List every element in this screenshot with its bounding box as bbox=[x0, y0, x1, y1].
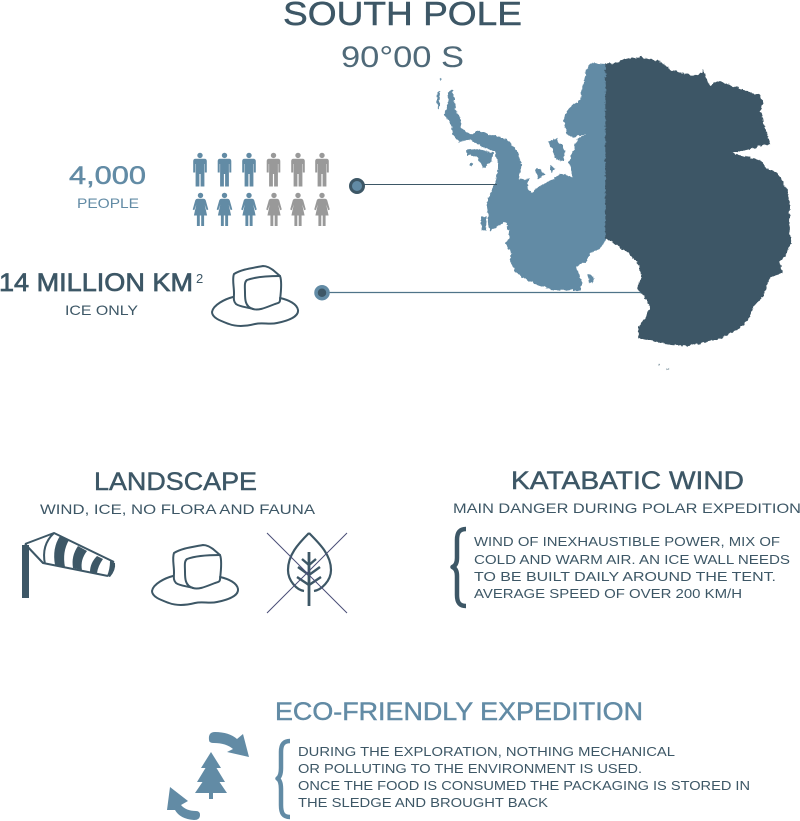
icon: ice cube bbox=[212, 266, 298, 326]
subheading: landscape: WIND, ICE, NO FLORA AND FAUNA bbox=[40, 501, 316, 517]
icon: windsock bbox=[22, 533, 115, 598]
connector: ice to map bbox=[316, 287, 641, 299]
heading: landscape: LANDSCAPE bbox=[94, 468, 257, 496]
ice area: 2 bbox=[196, 271, 203, 286]
people count: PEOPLE bbox=[77, 195, 139, 211]
heading: katabatic wind: KATABATIC WIND bbox=[511, 467, 744, 495]
icon: crossed-out leaf bbox=[267, 533, 347, 613]
west Antarctica bbox=[437, 63, 606, 291]
text: katabatic description: WIND OF INEXHAUSTIBLE POWER, MIX OF bbox=[474, 534, 780, 549]
text: katabatic description: AVERAGE SPEED OF OVER 200 KM/H bbox=[474, 586, 742, 601]
ice area bbox=[0, 269, 203, 318]
icon: ice cube bbox=[152, 545, 238, 605]
east Antarctica bbox=[605, 57, 792, 346]
connector: people to map bbox=[350, 180, 497, 192]
ice area: ICE ONLY bbox=[65, 302, 139, 318]
people count: 4,000 bbox=[69, 162, 146, 190]
coordinates: 90°00 S bbox=[341, 41, 464, 74]
subheading: katabatic wind: MAIN DANGER DURING POLAR EXPEDITION bbox=[453, 500, 800, 516]
text: eco description: THE SLEDGE AND BROUGHT BACK bbox=[298, 795, 548, 810]
text: eco description: DURING THE EXPLORATION, NOTHING MECHANICAL bbox=[298, 744, 675, 759]
brace bbox=[278, 741, 290, 817]
text: katabatic description: TO BE BUILT DAILY AROUND THE TENT. bbox=[474, 569, 776, 584]
people icons bbox=[193, 153, 330, 226]
text: eco description: OR POLLUTING TO THE ENVIRONMENT IS USED. bbox=[298, 761, 642, 776]
people count bbox=[69, 162, 146, 211]
brace bbox=[452, 529, 466, 606]
text: eco description bbox=[298, 744, 750, 810]
ice area: 14 MILLION KM bbox=[0, 269, 193, 297]
text: katabatic description bbox=[474, 534, 790, 601]
map: Antarctica bbox=[437, 57, 792, 370]
heading: eco-friendly expedition: ECO-FRIENDLY EXPEDITION bbox=[275, 698, 643, 726]
text: katabatic description: COLD AND WARM AIR. AN ICE WALL NEEDS bbox=[474, 552, 790, 567]
text: eco description: ONCE THE FOOD IS CONSUMED THE PACKAGING IS STORED IN bbox=[298, 778, 750, 793]
icon: tree with recycling arrows bbox=[167, 732, 249, 820]
